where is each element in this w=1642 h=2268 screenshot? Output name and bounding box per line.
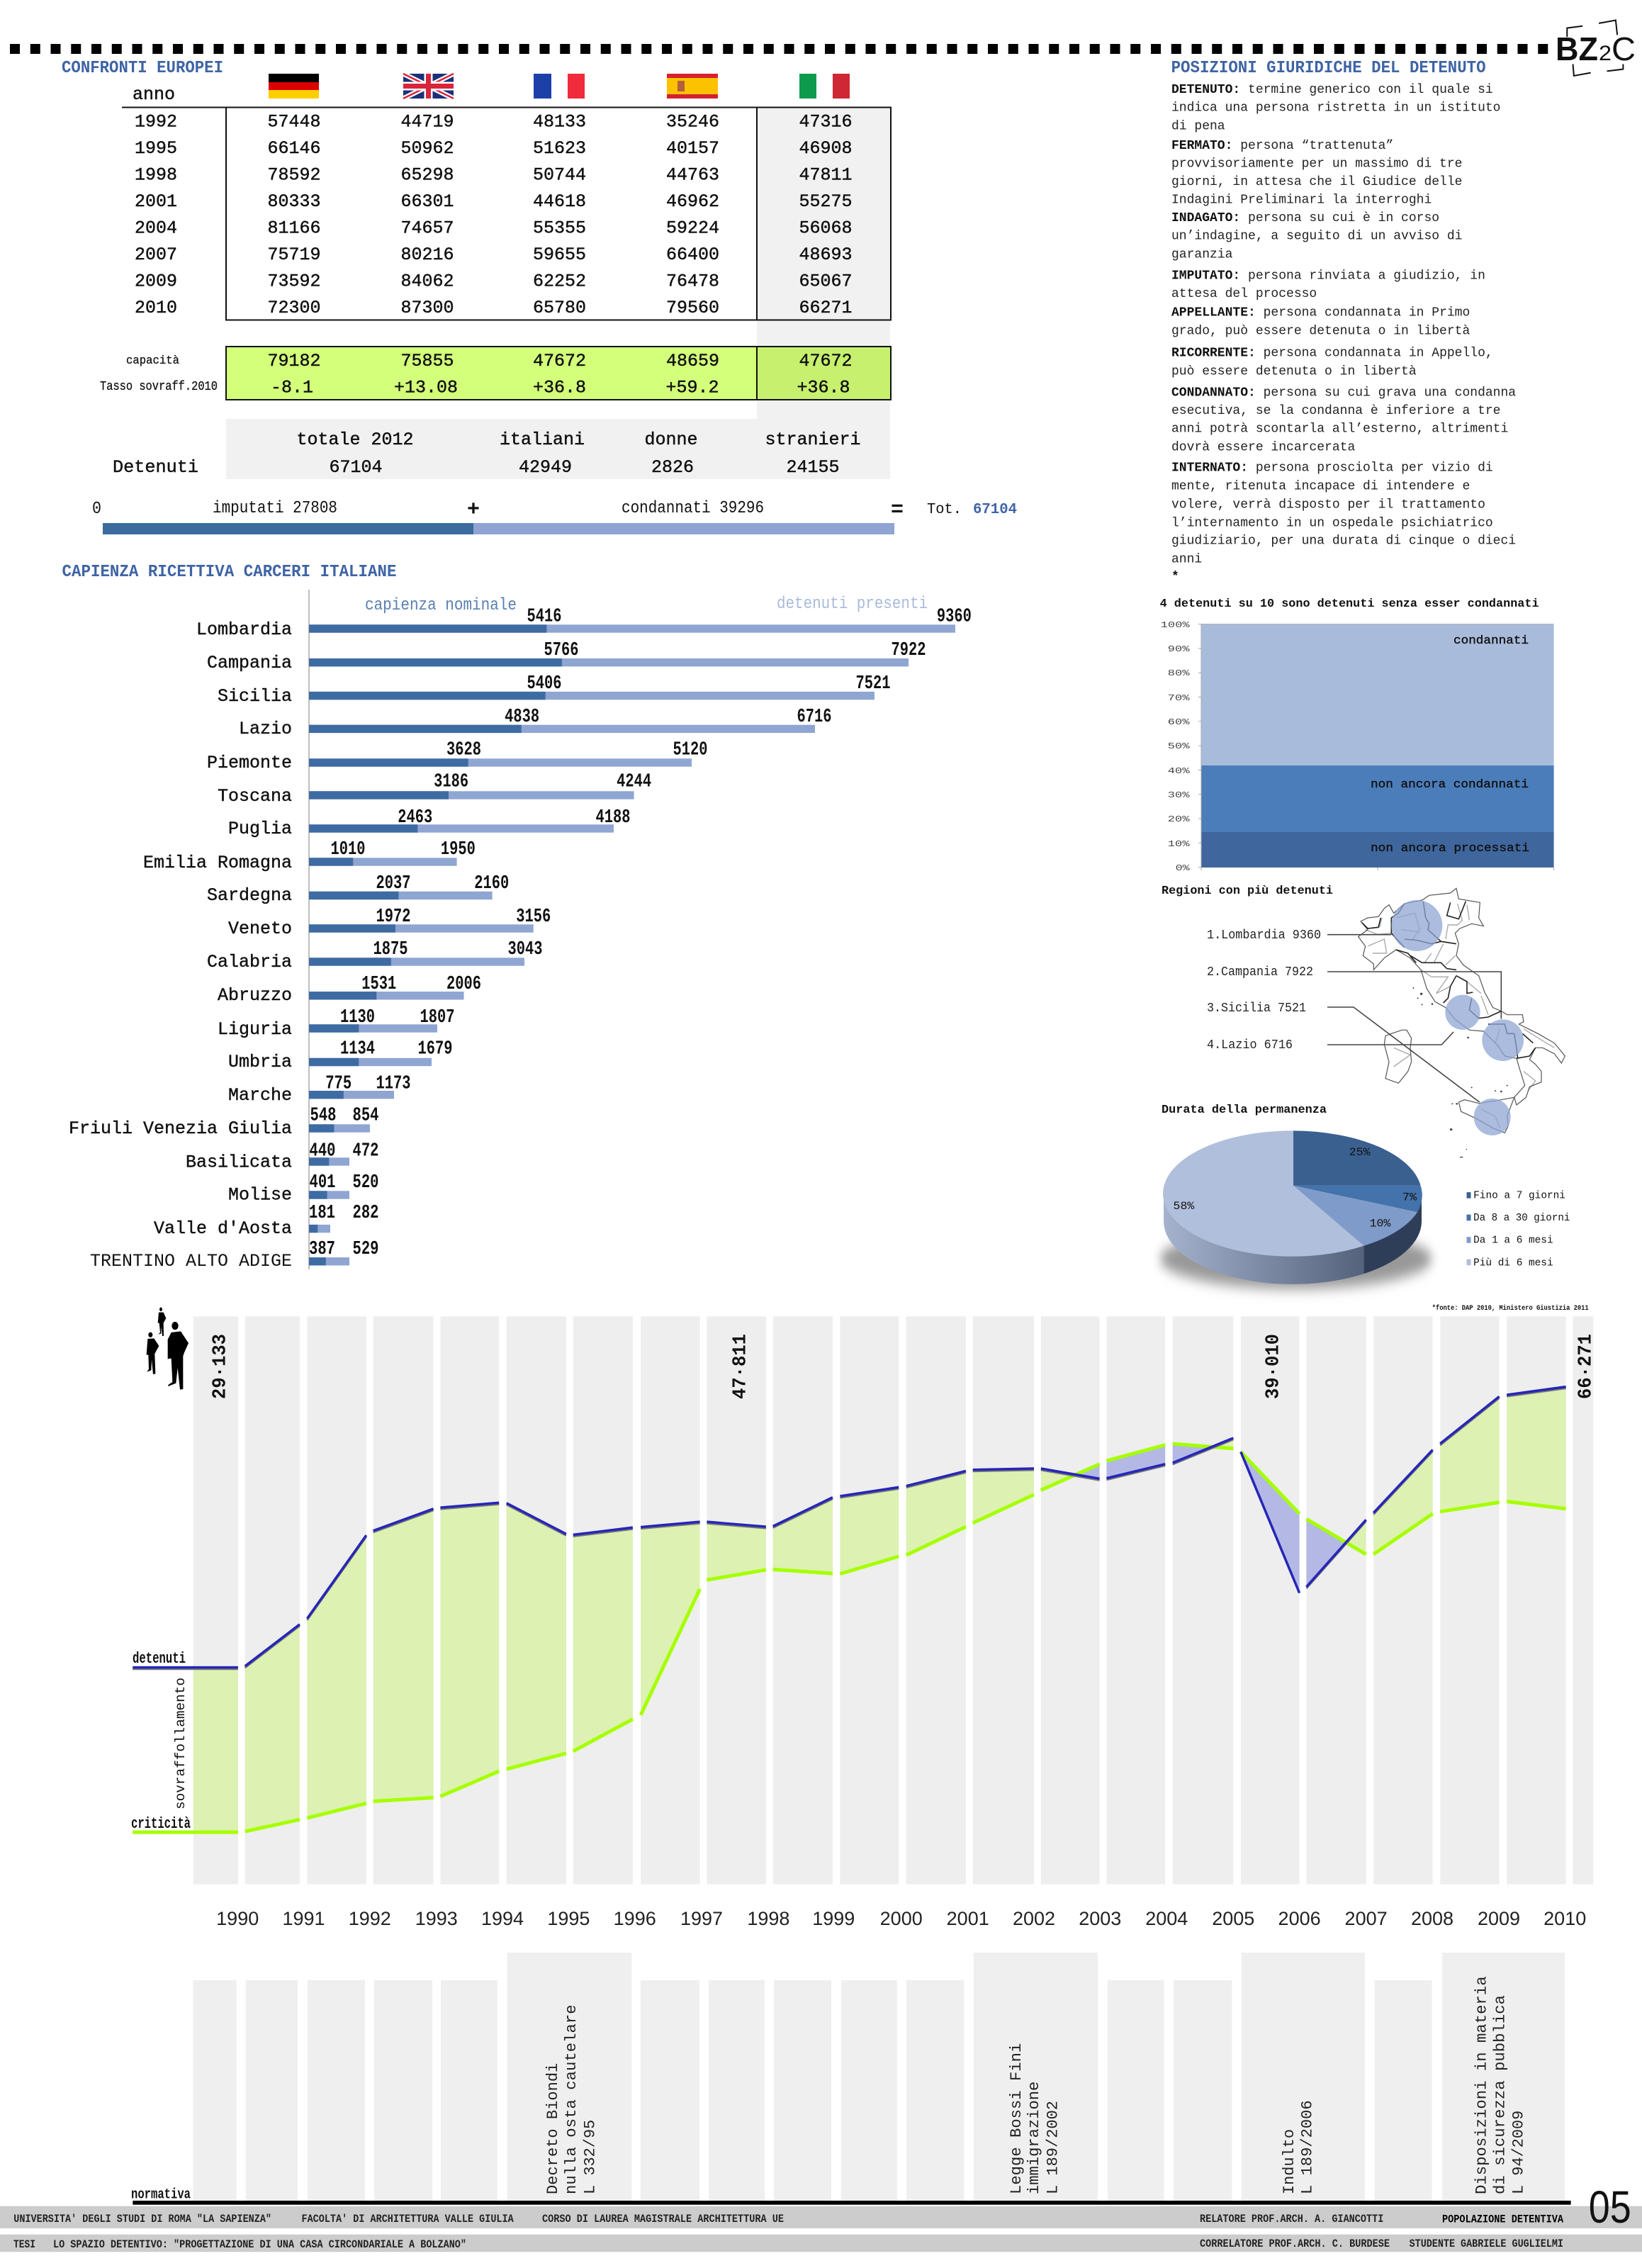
value: 47·811: 47·811 xyxy=(730,1334,751,1399)
table rows: detenuti per anno: 78592 xyxy=(267,164,321,186)
axis labels: 50% xyxy=(1168,741,1191,751)
panel: capacità e tasso di sovraffollamento: Tasso sovraff.2010 xyxy=(100,380,218,394)
law: Indulto: Indulto xyxy=(1281,2129,1298,2194)
text block: definizioni: garanzia xyxy=(1171,248,1233,262)
region labels: Veneto xyxy=(228,919,292,939)
table rows: detenuti per anno: 65067 xyxy=(799,271,853,292)
region labels: Basilicata xyxy=(186,1152,292,1172)
footer: text row 2 xyxy=(13,2238,1563,2251)
text block: definizioni: INDAGATO: persona su cui è in corso xyxy=(1171,211,1439,225)
value labels: 2006 xyxy=(446,974,481,995)
text block: definizioni: anni xyxy=(1171,553,1202,567)
area and lines 1990-2000 xyxy=(133,1487,899,1832)
axis labels: 80% xyxy=(1168,668,1191,678)
chart: imputati e condannati: condannati 39296 xyxy=(622,499,764,518)
table rows: detenuti per anno: 80216 xyxy=(400,245,454,265)
footer: text row 1: UNIVERSITA' DEGLI STUDI DI ROMA "LA SAPIENZA" xyxy=(13,2213,271,2225)
table rows: detenuti per anno: 59224 xyxy=(666,218,719,238)
table rows: detenuti per anno: 46908 xyxy=(799,138,853,159)
footer: text row 2: CORRELATORE PROF.ARCH. C. BURDESE xyxy=(1200,2238,1390,2250)
icon: silhouettes xyxy=(147,1308,189,1390)
value labels: 775 xyxy=(325,1073,352,1094)
panel: capacità e tasso di sovraffollamento: +36.8 xyxy=(533,377,586,398)
table rows: detenuti per anno: 84062 xyxy=(400,271,454,292)
panel: detenuti 2012: 2826 xyxy=(651,457,694,478)
value labels: 1950 xyxy=(441,839,476,860)
panel: capacità e tasso di sovraffollamento: +36.8 xyxy=(797,377,850,398)
legend: Da 8 a 30 giorni xyxy=(1473,1211,1570,1224)
value labels: 2463 xyxy=(398,807,432,829)
region labels: Calabria xyxy=(207,952,292,972)
footer: text row 2: STUDENTE GABRIELE GUGLIELMI xyxy=(1410,2238,1563,2250)
table rows: detenuti per anno: 55355 xyxy=(533,218,586,238)
legend: Da 1 a 6 mesi xyxy=(1473,1234,1553,1246)
value labels: 1531 xyxy=(361,974,396,995)
value labels: 7521 xyxy=(856,673,890,695)
page number: 05 xyxy=(1589,2182,1631,2233)
year axis: 1995 xyxy=(547,1908,590,1929)
table rows: detenuti per anno: 66301 xyxy=(400,191,454,212)
year columns xyxy=(193,1316,1593,1885)
value labels: 529 xyxy=(353,1239,378,1260)
text block: definizioni: anni potrà scontarla all’esterno, altrimenti xyxy=(1171,422,1508,437)
value labels: 4838 xyxy=(505,707,539,728)
panel: tabella confronti europei xyxy=(100,74,891,479)
slice: 58% xyxy=(1163,1130,1364,1257)
highlight: Lombardia xyxy=(1391,900,1442,951)
value labels: 548 xyxy=(310,1105,336,1126)
value labels: 181 xyxy=(309,1203,335,1224)
axis labels: 30% xyxy=(1168,790,1191,800)
slice: 7% xyxy=(1293,1186,1422,1212)
value labels: 854 xyxy=(353,1105,378,1126)
footer: text row 1: RELATORE PROF.ARCH. A. GIANCOTTI xyxy=(1200,2213,1383,2225)
value labels: 1130 xyxy=(340,1007,375,1028)
year axis: 1997 xyxy=(680,1908,723,1929)
text block: definizioni: grado, può essere detenuta o in libertà xyxy=(1171,325,1470,339)
bar chart: capienza ricettiva per regione xyxy=(69,590,972,1271)
pie chart: durata della permanenza: 7% xyxy=(1402,1192,1417,1204)
text block: definizioni: volere, verrà disposto per il trattamento xyxy=(1171,498,1485,512)
chart: detenuti e criticità 1990-2010 xyxy=(131,1308,1597,1929)
text block: definizioni xyxy=(1171,83,1516,584)
panel: capacità e tasso di sovraffollamento: capacità xyxy=(126,354,179,368)
table rows: detenuti per anno: 81166 xyxy=(267,218,321,238)
table rows: detenuti per anno: 47316 xyxy=(799,112,853,132)
table rows: detenuti per anno: 57448 xyxy=(267,112,321,132)
value labels: 1010 xyxy=(330,839,366,860)
bars dark xyxy=(309,624,562,1266)
text block: definizioni: può essere detenuta o in libertà xyxy=(1171,364,1417,378)
year axis: 2004 xyxy=(1145,1908,1188,1929)
table rows: detenuti per anno: 2010 xyxy=(135,298,177,318)
year axis: 2001 xyxy=(947,1908,989,1929)
panel: detenuti 2012: donne xyxy=(644,430,698,450)
table rows: detenuti per anno xyxy=(135,112,853,318)
text block: definizioni: RICORRENTE: persona condannata in Appello, xyxy=(1171,346,1493,360)
law: Legge Bossi Fini: Legge Bossi Fini xyxy=(1008,2043,1025,2194)
leader lines xyxy=(1327,935,1501,1102)
panel: capacità e tasso di sovraffollamento: +59.2 xyxy=(665,377,719,398)
legend: detenuti presenti: detenuti presenti xyxy=(777,595,928,614)
slice: 10% xyxy=(1293,1186,1417,1246)
table rows: detenuti per anno: 1995 xyxy=(135,138,177,159)
table rows: detenuti per anno: 1998 xyxy=(135,164,177,186)
logo: BZ2C: C xyxy=(1612,30,1636,67)
table rows: detenuti per anno: 55275 xyxy=(799,191,853,212)
year axis: 1992 xyxy=(349,1908,391,1929)
panel: capacità e tasso di sovraffollamento: 75855 xyxy=(400,351,454,371)
table rows: detenuti per anno: 73592 xyxy=(267,271,321,292)
value labels: 2037 xyxy=(376,873,411,894)
table rows: detenuti per anno: 2001 xyxy=(135,191,177,212)
table rows: detenuti per anno: 62252 xyxy=(533,271,586,292)
panel: capacità e tasso di sovraffollamento: 48659 xyxy=(666,351,719,371)
region labels: Puglia xyxy=(228,819,292,839)
flag: Germania xyxy=(269,74,319,99)
text block: definizioni: Indagini Preliminari la interroghi xyxy=(1171,193,1432,207)
panel: detenuti 2012: Detenuti xyxy=(113,457,198,478)
region labels xyxy=(69,619,292,1271)
axis labels: 100% xyxy=(1161,620,1191,630)
chart: imputati e condannati xyxy=(92,498,1017,534)
segment label: non ancora condannati: non ancora condannati xyxy=(1371,778,1529,792)
table rows: detenuti per anno: 40157 xyxy=(666,138,719,159)
value labels: 282 xyxy=(353,1203,378,1224)
heading: durata della permanenza: Durata della permanenza xyxy=(1162,1104,1327,1117)
value labels: 1875 xyxy=(373,939,408,960)
footer: text row 2: TESI xyxy=(13,2238,35,2251)
year axis: 2008 xyxy=(1411,1908,1453,1929)
law: Decreto Biondi: Decreto Biondi xyxy=(544,2063,562,2194)
chart: imputati e condannati: imputati 27808 xyxy=(213,499,337,518)
pie chart: durata della permanenza: 25% xyxy=(1349,1147,1371,1160)
year axis: 2005 xyxy=(1212,1908,1254,1929)
value labels: 1679 xyxy=(418,1039,452,1060)
footer: text row 1 xyxy=(13,2213,1563,2226)
value labels: 1972 xyxy=(376,906,411,928)
axis labels: 40% xyxy=(1168,766,1191,776)
law: Disposizioni in materia: di sicurezza pubblica xyxy=(1492,1995,1509,2194)
axis labels: 70% xyxy=(1168,693,1191,703)
table rows: detenuti per anno: 47811 xyxy=(799,164,853,186)
table rows: detenuti per anno: 50962 xyxy=(400,138,454,159)
region labels: Campania xyxy=(207,653,292,673)
region labels: Toscana xyxy=(218,786,292,807)
region labels: Molise xyxy=(228,1185,292,1206)
value labels: 472 xyxy=(353,1141,378,1162)
value labels: 5120 xyxy=(673,740,707,761)
value: 29·133: 29·133 xyxy=(210,1334,232,1399)
legend: Fino a 7 giorni xyxy=(1473,1189,1565,1201)
flag: Regno Unito xyxy=(403,74,454,99)
legend: capienza nominale: capienza nominale xyxy=(365,596,517,615)
chart: imputati e condannati: Tot. xyxy=(927,502,962,518)
highlight: Sicilia xyxy=(1474,1099,1511,1135)
text block: definizioni: attesa del processo xyxy=(1171,287,1317,301)
list: regioni: 2.Campania 7922 xyxy=(1207,965,1313,979)
logo: BZ2C xyxy=(1556,21,1636,76)
text block: definizioni: provvisoriamente per un massimo di tre xyxy=(1171,157,1462,172)
chart: stacked condannati xyxy=(1161,620,1554,873)
value labels: 2160 xyxy=(474,873,509,894)
year axis: 1990 xyxy=(216,1908,259,1929)
table header: anno: anno xyxy=(133,84,175,105)
value labels: 5766 xyxy=(544,640,578,661)
table rows: detenuti per anno: 48133 xyxy=(533,112,586,132)
footer: text row 1: CORSO DI LAUREA MAGISTRALE ARCHITETTURA UE xyxy=(542,2213,784,2225)
value labels: 1807 xyxy=(420,1007,455,1028)
panel: capacità e tasso di sovraffollamento: 47672 xyxy=(533,351,586,371)
table rows: detenuti per anno: 65298 xyxy=(400,164,454,186)
footer: text row 2: LO SPAZIO DETENTIVO: "PROGETTAZIONE DI UNA CASA CIRCONDARIALE A BOLZANO" xyxy=(53,2238,466,2251)
year axis: 1998 xyxy=(747,1908,789,1929)
text block: definizioni: FERMATO: persona “trattenuta” xyxy=(1171,139,1393,153)
region labels: Emilia Romagna xyxy=(143,853,292,873)
law: Disposizioni in materia xyxy=(1473,1976,1527,2194)
region labels: Valle d'Aosta xyxy=(154,1218,292,1239)
year axis: 2002 xyxy=(1013,1908,1055,1929)
panel: capacità e tasso di sovraffollamento: 47672 xyxy=(799,351,853,371)
region labels: Marche xyxy=(228,1085,292,1106)
table rows: detenuti per anno: 35246 xyxy=(666,112,719,132)
text block: definizioni: giudiziario, per una durata di cinque o dieci xyxy=(1171,534,1516,549)
table rows: detenuti per anno: 65780 xyxy=(533,298,586,318)
flag: Francia xyxy=(534,74,585,99)
value labels: 6716 xyxy=(797,707,832,728)
table rows: detenuti per anno: 44719 xyxy=(400,112,454,132)
panel: capacità e tasso di sovraffollamento: 79182 xyxy=(267,351,321,371)
label: normativa: normativa xyxy=(131,2187,191,2204)
panel: capacità e tasso di sovraffollamento: +13.08 xyxy=(394,377,458,398)
heading: posizioni giuridiche: POSIZIONI GIURIDICHE DEL DETENUTO xyxy=(1171,59,1486,78)
chart: imputati e condannati: 67104 xyxy=(973,502,1017,518)
highlight: Campania xyxy=(1482,1019,1524,1061)
value labels: 3156 xyxy=(516,906,551,928)
panel: detenuti 2012: 24155 xyxy=(786,457,840,478)
value labels xyxy=(309,607,972,1260)
axis labels: 90% xyxy=(1168,644,1191,654)
value labels: 3628 xyxy=(446,740,481,761)
region labels: Lazio xyxy=(239,719,292,739)
value labels: 401 xyxy=(309,1172,336,1194)
label: criticità: criticità xyxy=(131,1815,191,1833)
value labels: 440 xyxy=(309,1141,336,1162)
year axis: 2007 xyxy=(1345,1908,1388,1929)
value labels: 387 xyxy=(309,1239,335,1260)
law: Disposizioni in materia: L 94/2009 xyxy=(1509,2111,1527,2194)
chart: imputati e condannati: + xyxy=(467,498,480,522)
source note: *fonte: DAP 2010, Ministero Giustizia 2011 xyxy=(1432,1304,1589,1313)
law: Indulto xyxy=(1281,2100,1317,2194)
value labels: 3043 xyxy=(507,939,543,960)
legend xyxy=(1467,1189,1570,1269)
text block: definizioni: l’internamento in un ospedale psichiatrico xyxy=(1171,516,1493,530)
text block: definizioni: giorni, in attesa che il Giudice delle xyxy=(1171,175,1462,189)
table rows: detenuti per anno: 44618 xyxy=(533,191,586,212)
year axis: 1991 xyxy=(282,1908,325,1929)
region labels: Sardegna xyxy=(207,885,292,906)
year axis: 2009 xyxy=(1478,1908,1520,1929)
panel: detenuti 2012: totale 2012 xyxy=(296,430,414,450)
table rows: detenuti per anno: 74657 xyxy=(400,218,454,238)
normativa columns xyxy=(193,1953,1565,2201)
law: Legge Bossi Fini: L 189/2002 xyxy=(1045,2101,1062,2194)
pie chart: durata della permanenza: 10% xyxy=(1370,1218,1391,1231)
law: Decreto Biondi: L 332/95 xyxy=(581,2120,600,2194)
table rows: detenuti per anno: 2007 xyxy=(135,245,177,265)
pie chart: durata della permanenza: 58% xyxy=(1174,1201,1195,1213)
region labels: Lombardia xyxy=(196,619,292,640)
heading: regioni con più detenuti: Regioni con più detenuti xyxy=(1162,885,1333,898)
value labels: 5406 xyxy=(527,673,561,695)
region labels: Umbria xyxy=(228,1052,292,1072)
label: sovraffollamento: sovraffollamento xyxy=(173,1678,189,1809)
text block: definizioni: CONDANNATO: persona su cui grava una condanna xyxy=(1171,386,1516,400)
heading: confronti europei: CONFRONTI EUROPEI xyxy=(62,59,223,78)
bars light xyxy=(309,624,955,1266)
panel: capacità e tasso di sovraffollamento xyxy=(100,347,891,400)
value: 39·010: 39·010 xyxy=(1263,1334,1284,1399)
panel: normativa xyxy=(131,1953,1565,2204)
law: Legge Bossi Fini: immigrazione xyxy=(1025,2082,1043,2194)
footer: text row 1: POPOLAZIONE DETENTIVA xyxy=(1442,2213,1563,2226)
panel: detenuti 2012: 67104 xyxy=(329,457,383,478)
table rows: detenuti per anno: 75719 xyxy=(267,245,321,265)
text block: definizioni: di pena xyxy=(1171,119,1225,133)
list: regioni: 1.Lombardia 9360 xyxy=(1207,928,1321,943)
segment label: non ancora processati: non ancora processati xyxy=(1371,842,1529,855)
year axis: 1993 xyxy=(415,1908,458,1929)
list: regioni: 3.Sicilia 7521 xyxy=(1207,1001,1306,1016)
axis labels xyxy=(1161,620,1191,873)
area and lines 2001-2010 xyxy=(906,1387,1566,1593)
footer: text row 1: FACOLTA' DI ARCHITETTURA VALLE GIULIA xyxy=(302,2213,514,2225)
text block: definizioni: mente, ritenuta incapace di intendere e xyxy=(1171,479,1470,493)
map: Italia con regioni xyxy=(1327,888,1565,1157)
value labels: 4244 xyxy=(617,772,651,793)
logo: BZ2C: BZ xyxy=(1556,30,1598,67)
table rows: detenuti per anno: 66271 xyxy=(799,298,853,318)
flag: Spagna xyxy=(667,74,718,99)
text block: definizioni: * xyxy=(1171,570,1179,584)
value labels: 4188 xyxy=(595,807,631,829)
law: Legge Bossi Fini xyxy=(1008,2043,1062,2194)
text block: definizioni: un’indagine, a seguito di un avviso di xyxy=(1171,230,1462,244)
text block: definizioni: APPELLANTE: persona condannata in Primo xyxy=(1171,306,1470,320)
table rows: detenuti per anno: 2004 xyxy=(135,218,177,238)
text block: definizioni: dovrà essere incarcerata xyxy=(1171,441,1355,455)
year axis: 2003 xyxy=(1079,1908,1121,1929)
panel: detenuti 2012: stranieri xyxy=(765,430,861,450)
slice: 25% xyxy=(1293,1130,1421,1186)
table rows: detenuti per anno: 59655 xyxy=(533,245,586,265)
axis labels: 0% xyxy=(1176,863,1191,873)
table rows: detenuti per anno: 79560 xyxy=(666,298,719,318)
axis labels: 60% xyxy=(1168,717,1191,727)
value labels: 3186 xyxy=(434,772,468,793)
heading: 4 detenuti su 10: 4 detenuti su 10 sono detenuti senza esser condannati xyxy=(1160,597,1539,611)
table rows: detenuti per anno: 48693 xyxy=(799,245,853,265)
region labels: Abruzzo xyxy=(218,985,292,1006)
flag: Italia xyxy=(799,74,850,99)
list: regioni: 4.Lazio 6716 xyxy=(1207,1038,1293,1052)
value labels: 520 xyxy=(353,1172,378,1194)
text block: definizioni: INTERNATO: persona prosciolta per vizio di xyxy=(1171,461,1493,475)
table rows: detenuti per anno: 46962 xyxy=(666,191,719,212)
region labels: TRENTINO ALTO ADIGE xyxy=(90,1251,292,1271)
footer: bands xyxy=(0,2201,1642,2252)
year axis: 2000 xyxy=(880,1908,923,1929)
chart: imputati e condannati: 0 xyxy=(92,500,101,519)
region labels: Piemonte xyxy=(207,753,292,773)
table rows: detenuti per anno: 72300 xyxy=(267,298,321,318)
panel: detenuti 2012: italiani xyxy=(500,430,585,450)
table rows: detenuti per anno: 2009 xyxy=(135,271,177,292)
table rows: detenuti per anno: 66146 xyxy=(267,138,321,159)
table rows: detenuti per anno: 1992 xyxy=(135,112,177,132)
panel: detenuti 2012 xyxy=(113,430,861,478)
table rows: detenuti per anno: 66400 xyxy=(666,245,719,265)
label: detenuti: detenuti xyxy=(133,1650,186,1668)
axis labels: 20% xyxy=(1168,814,1191,824)
law: Disposizioni in materia: Disposizioni in materia xyxy=(1473,1976,1491,2194)
legend: Più di 6 mesi xyxy=(1473,1257,1553,1269)
table rows: detenuti per anno: 76478 xyxy=(666,271,719,292)
value labels: 5416 xyxy=(527,607,561,628)
year axis: 2010 xyxy=(1543,1908,1586,1929)
text block: definizioni: DETENUTO: termine generico con il quale si xyxy=(1171,83,1493,97)
year axis: 1996 xyxy=(614,1908,656,1929)
law: Decreto Biondi: nulla osta cautelare xyxy=(563,2004,580,2194)
region labels: Liguria xyxy=(218,1019,292,1040)
year axis: 2006 xyxy=(1278,1908,1321,1929)
law: Decreto Biondi xyxy=(544,2004,600,2194)
text block: definizioni: indica una persona ristretta in un istituto xyxy=(1171,101,1500,115)
axis labels: 10% xyxy=(1168,839,1191,849)
table rows: detenuti per anno: 51623 xyxy=(533,138,586,159)
segment label: condannati: condannati xyxy=(1453,634,1529,648)
year axis: 1994 xyxy=(481,1908,524,1929)
table rows: detenuti per anno: 44763 xyxy=(666,164,719,186)
table rows: detenuti per anno: 80333 xyxy=(267,191,321,212)
year axis: 1999 xyxy=(812,1908,855,1929)
panel: detenuti 2012: 42949 xyxy=(519,457,572,478)
value labels: 9360 xyxy=(937,607,972,628)
region labels: Sicilia xyxy=(218,686,292,707)
chart: imputati e condannati: = xyxy=(891,498,904,522)
pie chart: durata della permanenza xyxy=(1160,1130,1570,1289)
highlight: Lazio xyxy=(1445,995,1480,1030)
text block: definizioni: esecutiva, se la condanna è inferiore a tre xyxy=(1171,404,1500,418)
value labels: 1173 xyxy=(376,1073,411,1094)
year axis xyxy=(216,1908,1586,1929)
heading: capienza ricettiva: CAPIENZA RICETTIVA CARCERI ITALIANE xyxy=(62,563,397,582)
value: 66·271: 66·271 xyxy=(1576,1334,1597,1399)
panel: capacità e tasso di sovraffollamento: -8.1 xyxy=(271,377,313,398)
value labels: 1134 xyxy=(340,1039,375,1060)
table rows: detenuti per anno: 87300 xyxy=(400,298,454,318)
law: Indulto: L 189/2006 xyxy=(1298,2100,1317,2194)
logo: BZ2C: 2 xyxy=(1599,42,1612,65)
table rows: detenuti per anno: 56068 xyxy=(799,218,853,238)
table rows: detenuti per anno: 50744 xyxy=(533,164,586,186)
text block: definizioni: IMPUTATO: persona rinviata a giudizio, in xyxy=(1171,269,1485,284)
region labels: Friuli Venezia Giulia xyxy=(69,1118,292,1139)
list: regioni xyxy=(1207,928,1321,1052)
value labels: 7922 xyxy=(892,640,926,661)
